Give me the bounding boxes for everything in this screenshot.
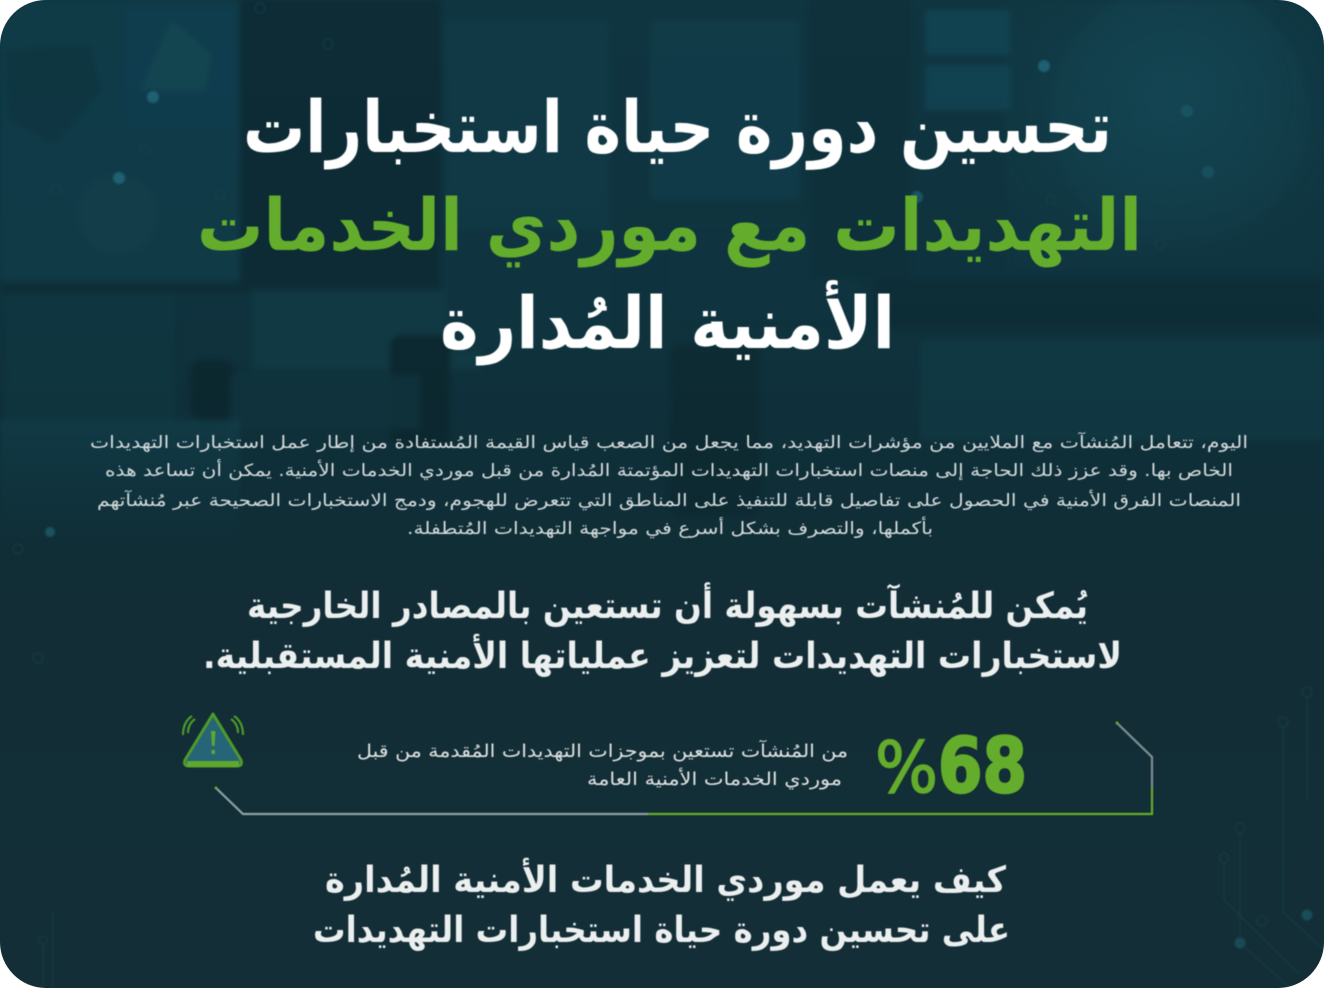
intro paragraph: المنصات الفرق الأمنية في الحصول على تفاصيل قابلة للتنفيذ على المناطق التي تتعرض للهجوم، ودمج الاستخبارات الصحيحة عبر مُنشآتهم	[97, 489, 1241, 511]
stat description: موردي الخدمات الأمنية العامة	[587, 768, 842, 790]
closing heading: على تحسين دورة حياة استخبارات التهديدات	[313, 910, 1010, 951]
stat description	[357, 739, 848, 790]
stat value: 68	[938, 721, 1027, 810]
subheading	[203, 582, 1122, 677]
stat description: من المُنشآت تستعين بموجزات التهديدات المُقدمة من قبل	[357, 739, 848, 762]
stat value	[875, 721, 1027, 810]
subheading: لاستخبارات التهديدات لتعزيز عملياتها الأمنية المستقبلية.	[203, 633, 1122, 677]
title	[197, 85, 1142, 366]
intro paragraph: اليوم، تتعامل المُنشآت مع الملايين من مؤشرات التهديد، مما يجعل من الصعب قياس القيمة المُستفادة من إطار عمل استخبارات التهديدات	[90, 431, 1248, 453]
intro paragraph: الخاص بها. وقد عزز ذلك الحاجة إلى منصات استخبارات التهديدات المؤتمتة المُدارة من قبل موردي الخدمات الأمنية. يمكن أن تساعد هذه	[105, 459, 1233, 481]
closing heading: كيف يعمل موردي الخدمات الأمنية المُدارة	[325, 857, 1006, 901]
stat value: %	[875, 727, 938, 809]
title line 2: التهديدات مع موردي الخدمات	[197, 183, 1142, 268]
intro paragraph: بأكملها، والتصرف بشكل أسرع في مواجهة التهديدات المُتطفلة.	[407, 516, 933, 539]
subheading: يُمكن للمُنشآت بسهولة أن تستعين بالمصادر الخارجية	[247, 582, 1088, 627]
stat frame	[214, 722, 1152, 814]
closing heading	[313, 857, 1010, 951]
icon: warning triangle with alarm waves	[183, 714, 243, 767]
title line 1: تحسين دورة حياة استخبارات	[243, 85, 1112, 170]
title line 3: الأمنية المُدارة	[440, 279, 895, 366]
intro paragraph	[90, 431, 1248, 539]
